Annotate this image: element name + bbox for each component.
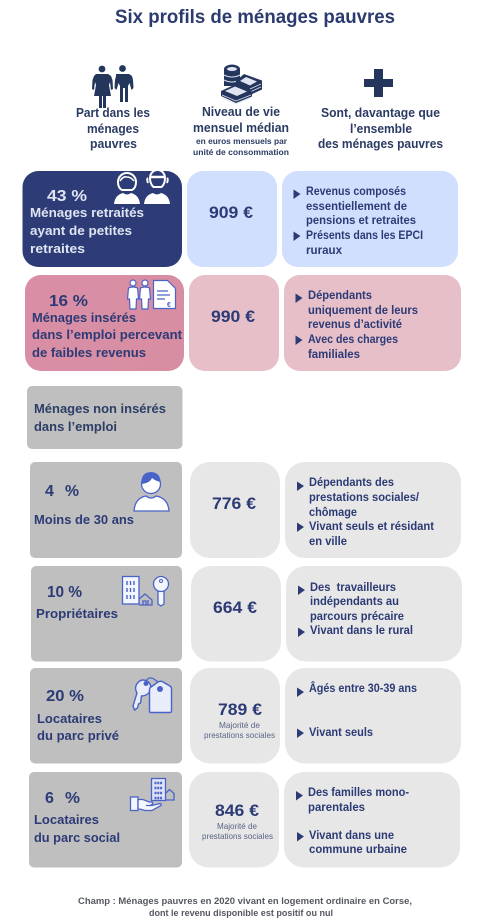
icon: building and key (122, 576, 168, 606)
panel: retired profile (22, 170, 182, 267)
row: under 30 (30, 462, 461, 558)
header text: sont davantage: des ménages pauvres (318, 137, 443, 151)
icon: people and payslip (128, 280, 176, 309)
panel: under 30 characteristics (285, 462, 461, 558)
panel: income 846 (189, 772, 279, 868)
panel: retired profile: retraites (30, 241, 85, 256)
column header: characteristics (318, 69, 443, 151)
row: owners (31, 566, 462, 662)
panel: social renters profile: Locataires (34, 812, 99, 827)
icon: plus (364, 69, 393, 97)
panel: employed profile: dans l’emploi percevant (32, 327, 183, 342)
panel: retired characteristics: ruraux (306, 245, 343, 257)
row: social renters (29, 772, 460, 868)
panel: private renters profile: Locataires (37, 711, 102, 726)
footnote: Champ : Ménages pauvres en 2020 vivant en logement ordinaire en Corse, (78, 896, 412, 907)
panel: employed characteristics (284, 275, 461, 371)
header text: sont davantage (318, 106, 443, 151)
panel: under 30 characteristics: chômage (309, 507, 357, 519)
footnote (78, 896, 412, 919)
panel: income 909 (187, 171, 277, 267)
panel: income 990: 990 € (211, 307, 256, 326)
header text: part: pauvres (90, 137, 137, 151)
panel: owners profile: Propriétaires (36, 606, 118, 621)
icon: keys and tag (133, 678, 172, 712)
header text: niveau de vie: unité de consommation (193, 147, 289, 157)
panel: employed characteristics: revenus d’activité (308, 319, 402, 331)
panel: owners characteristics: Vivant dans le rural (310, 625, 413, 637)
panel: income 776 (190, 462, 280, 558)
panel: private renters characteristics: Vivant seuls (309, 727, 373, 739)
panel: owners characteristics: indépendants au (310, 596, 399, 608)
icon: coins and banknotes (221, 64, 262, 104)
panel: under 30 characteristics: Dépendants des (309, 477, 394, 489)
icon: hand holding building (130, 778, 174, 810)
panel: social renters characteristics: Vivant dans une (309, 830, 394, 842)
panel: income 846: prestations sociales (202, 831, 273, 841)
panel: employed characteristics: Avec des charges (308, 334, 398, 346)
panel: employed characteristics: Dépendants (308, 290, 372, 302)
panel: under 30 characteristics: prestations sociales/ (309, 492, 420, 504)
section heading: not in employment (27, 386, 182, 449)
icon: couple (92, 65, 134, 108)
panel: social renters profile (29, 772, 182, 868)
panel: social renters profile: du parc social (34, 830, 120, 845)
panel: under 30 profile: % (65, 483, 79, 500)
panel: retired profile: ayant de petites (30, 223, 132, 238)
panel: owners characteristics: parcours précaire (310, 611, 404, 623)
header text: part (76, 106, 150, 151)
footnote: dont le revenu disponible est positif ou nul (149, 908, 333, 919)
panel: owners characteristics: Des travailleurs (310, 582, 396, 594)
panel: employed profile: de faibles revenus (32, 345, 146, 360)
header text: niveau de vie (193, 105, 289, 157)
icon: young person (134, 472, 169, 511)
panel: retired characteristics: Présents dans les EPCI (306, 230, 423, 242)
panel: retired profile: 43 % (47, 188, 87, 205)
panel: private renters profile: 20 % (46, 688, 84, 705)
panel: income 909: 909 € (209, 203, 254, 222)
panel: social renters characteristics (284, 772, 460, 868)
row: private renters (30, 668, 461, 764)
header text: part: Part dans les (76, 106, 150, 120)
panel: social renters characteristics: commune urbaine (309, 844, 407, 856)
header text: niveau de vie: mensuel médian (193, 121, 289, 135)
panel: private renters profile (30, 668, 182, 764)
panel: under 30 profile: 4 (45, 483, 54, 500)
panel: retired profile: Ménages retraités (30, 205, 144, 220)
panel: employed profile: 16 % (49, 293, 88, 310)
panel: employed profile: Ménages insérés (32, 310, 136, 325)
panel: owners profile (31, 566, 182, 662)
title: Six profils de ménages pauvres (115, 7, 395, 28)
panel: income 846: Majorité de (217, 821, 257, 831)
row: retired households (22, 170, 458, 267)
panel: employed characteristics: uniquement de leurs (308, 305, 418, 317)
row: working poor households (25, 275, 461, 371)
panel: retired characteristics: essentiellement de (306, 201, 407, 213)
panel: income 789: prestations sociales (204, 730, 275, 740)
panel: income 789: 789 € (218, 700, 263, 719)
panel: income 990 (189, 275, 279, 371)
panel: private renters characteristics (285, 668, 461, 764)
panel: private renters profile: du parc privé (37, 728, 119, 743)
section heading: not in employment: Ménages non insérés (34, 401, 166, 416)
header text: sont davantage: Sont, davantage que (321, 106, 440, 120)
panel: owners profile: 10 % (47, 584, 82, 601)
panel: under 30 characteristics: en ville (309, 536, 347, 548)
header text: sont davantage: l’ensemble (350, 122, 412, 136)
panel: retired characteristics: Revenus composés (306, 186, 406, 198)
panel: under 30 profile: Moins de 30 ans (34, 512, 134, 527)
panel: income 789 (190, 668, 280, 764)
panel: income 776: 776 € (212, 494, 257, 513)
panel: social renters characteristics: Des familles mono- (308, 787, 409, 799)
panel: retired characteristics: pensions et retraites (306, 215, 416, 227)
header text: part: ménages (87, 122, 139, 136)
panel: income 664 (191, 566, 281, 662)
header text: niveau de vie: en euros mensuels par (196, 136, 288, 146)
panel: employed characteristics: familiales (308, 349, 360, 361)
header text: niveau de vie: Niveau de vie (202, 105, 280, 119)
panel: private renters characteristics: Âgés entre 30-39 ans (309, 682, 417, 695)
column header: share (76, 65, 150, 151)
panel: social renters profile: % (65, 790, 80, 807)
panel: employed profile (25, 275, 184, 371)
column header: median income (193, 64, 289, 157)
panel: income 664: 664 € (213, 598, 258, 617)
section heading: not in employment: dans l’emploi (34, 419, 117, 434)
icon: two retirees (114, 170, 170, 204)
panel: income 789: Majorité de (219, 720, 260, 730)
panel: income 846: 846 € (215, 801, 260, 820)
panel: owners characteristics (286, 566, 462, 662)
panel: social renters characteristics: parentales (308, 802, 365, 814)
panel: employed profile: € (167, 302, 171, 309)
panel: social renters profile: 6 (45, 790, 54, 807)
panel: under 30 characteristics: Vivant seuls et résidant (309, 521, 434, 533)
panel: under 30 profile (30, 462, 182, 558)
panel: retired characteristics (282, 171, 458, 267)
